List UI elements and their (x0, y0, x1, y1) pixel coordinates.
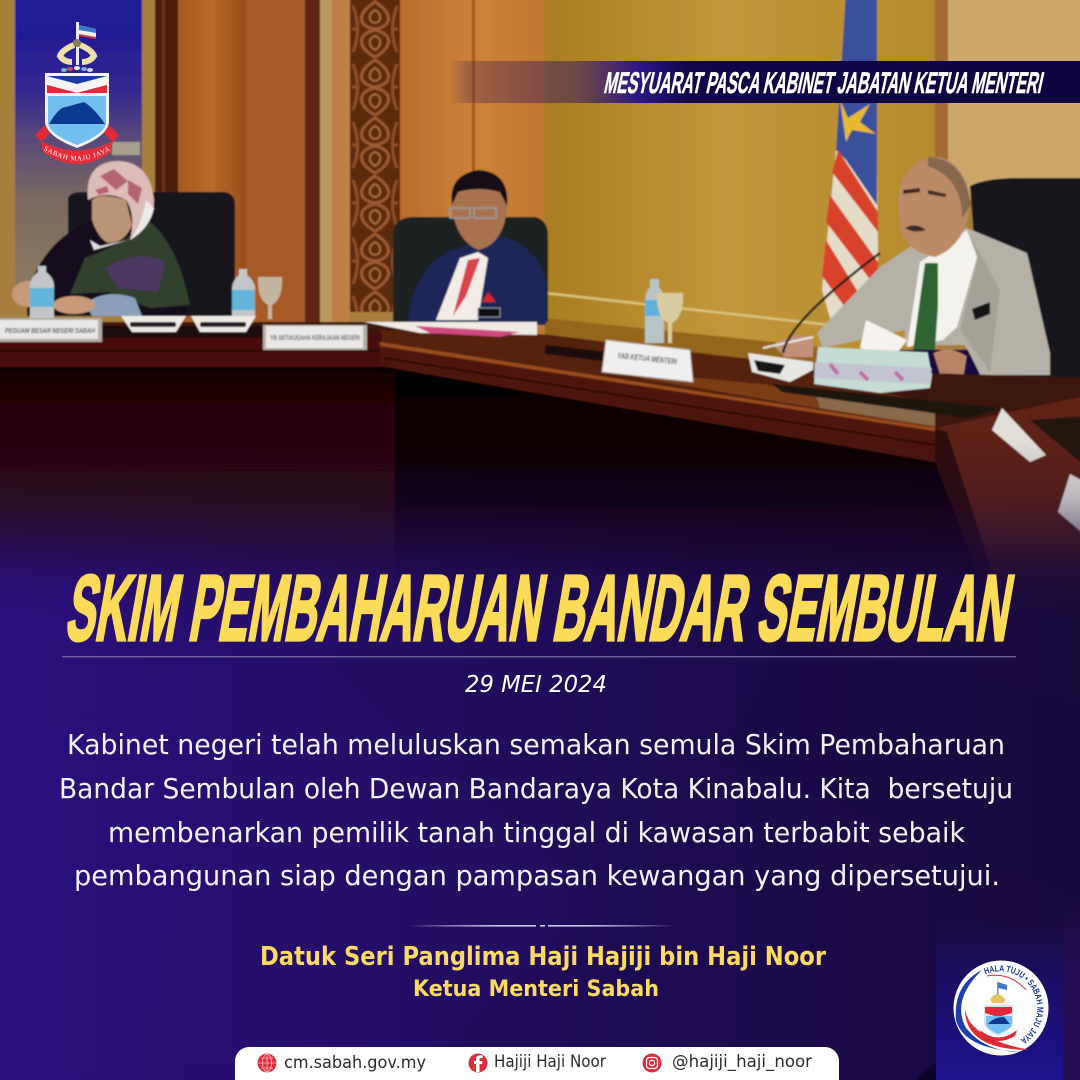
Sabah coat of arms logo (35, 22, 119, 164)
name plates: YAB KETUA MENTERI (617, 351, 678, 366)
Hala Tuju badge: HALA TUJU • SABAH MAJU JAYA (984, 965, 1044, 1044)
right front panel (395, 362, 1010, 660)
website: cm.sabah.gov.my (284, 1053, 426, 1072)
body text: Kabinet negeri telah meluluskan semakan semula Skim Pembaharuan (67, 729, 1005, 761)
body text: pembangunan siap dengan pampasan kewangan yang dipersetujui. (74, 860, 1000, 892)
bottles and glasses (30, 266, 683, 343)
left front panel (0, 367, 395, 660)
Hala Tuju badge (954, 960, 1048, 1056)
tissue box (814, 320, 932, 393)
body text: membenarkan pemilik tanah tinggal di kawasan terbabit sebaik (108, 817, 965, 849)
purple geometric lower background (0, 440, 1080, 1080)
date: 29 MEI 2024 (465, 672, 607, 698)
body text (59, 729, 1013, 892)
left table edge (0, 334, 382, 367)
name plates: YB SETIAUSAHA KERAJAAN NEGERI (270, 335, 360, 342)
right table top (935, 395, 1080, 660)
signature divider (408, 925, 676, 927)
woman at left (12, 161, 190, 316)
title divider (62, 656, 1016, 657)
name plates: PEGUAM BESAR NEGERI SABAH (5, 328, 96, 335)
speaker name (260, 942, 826, 1002)
instagram: @hajiji_haji_noor (672, 1052, 812, 1072)
wall panels (0, 0, 1080, 385)
chief minister speaking (763, 157, 1050, 375)
chairs (68, 178, 1080, 385)
Malaysian flag (822, 0, 878, 325)
header banner (450, 61, 1080, 103)
table objects (0, 253, 1080, 535)
conference microphones (100, 253, 880, 382)
speaker name: Datuk Seri Panglima Haji Hajiji bin Haji Noor (260, 942, 826, 972)
meeting room photo (0, 0, 1080, 660)
man in navy suit (407, 170, 546, 325)
name plates (0, 318, 1080, 535)
desk mat (772, 384, 1002, 418)
Sabah coat of arms logo: SABAH MAJU JAYA (44, 146, 110, 161)
facebook: Hajiji Haji Noor (494, 1052, 606, 1071)
right table edge (380, 342, 935, 462)
body text: Bandar Sembulan oleh Dewan Bandaraya Kota Kinabalu. Kita bersetuju (59, 773, 1013, 805)
speaker name: Ketua Menteri Sabah (413, 976, 659, 1002)
table (0, 322, 1080, 660)
contact bar (235, 1047, 839, 1080)
